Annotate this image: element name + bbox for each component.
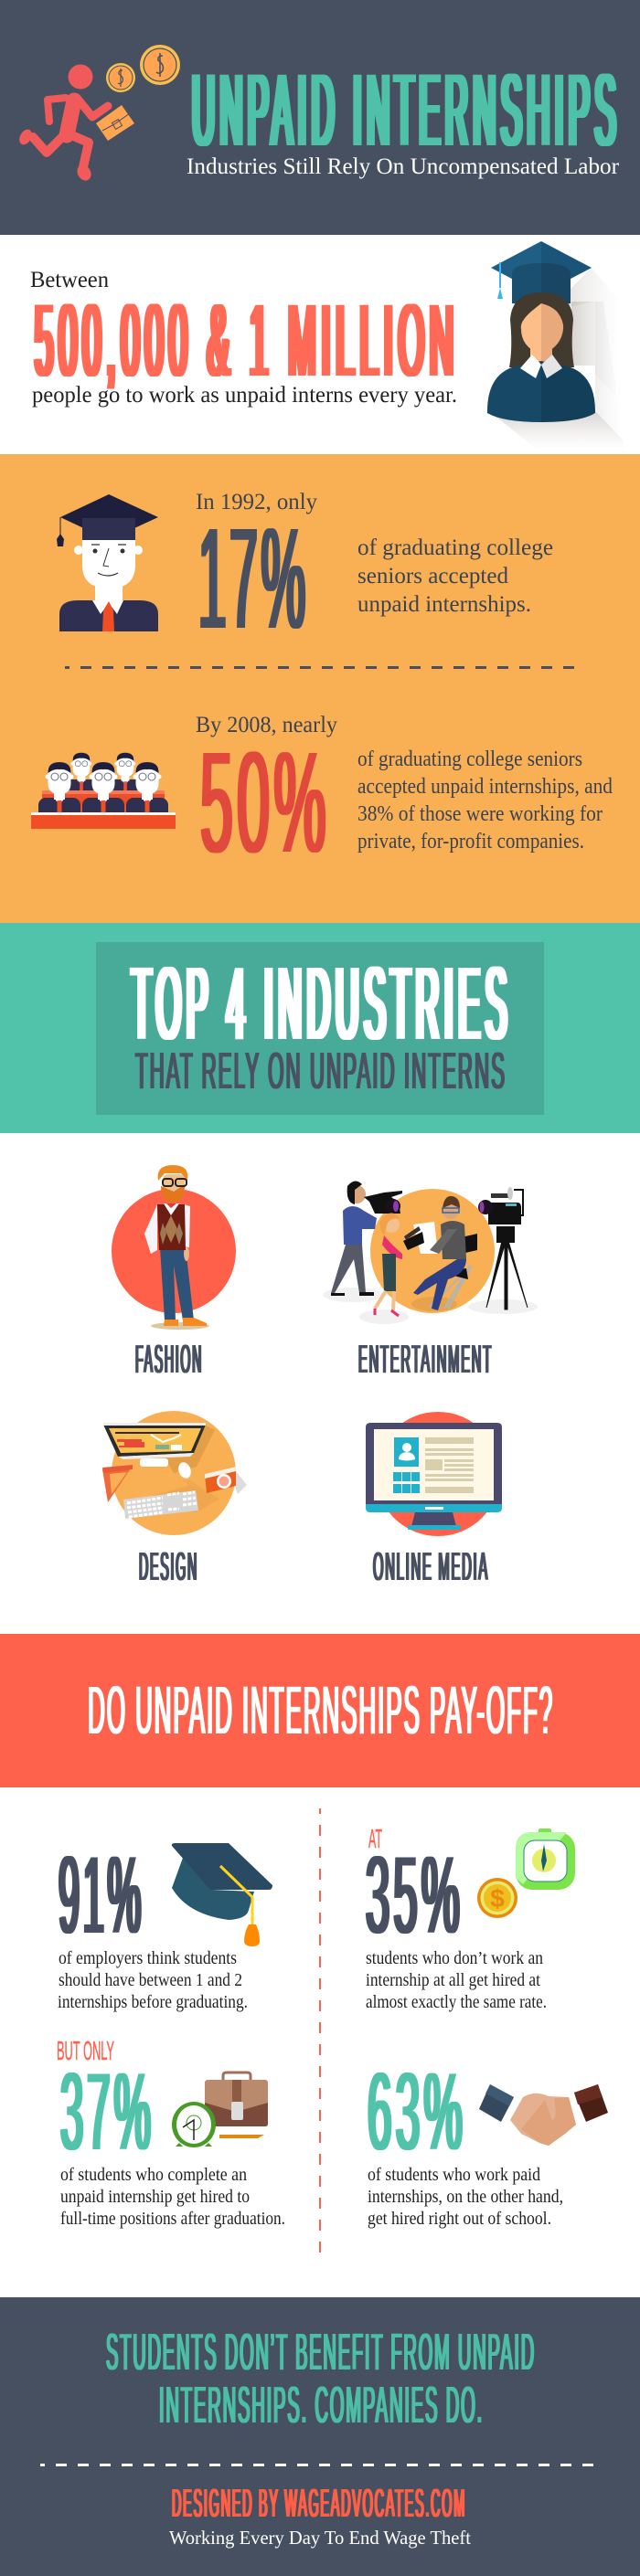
- text: 37 percent description: unpaid internship get hired to: [60, 2187, 250, 2207]
- icon: gold coin: [477, 1878, 517, 1918]
- text: in 1992: In 1992, only: [196, 490, 317, 514]
- panel: industries: DESIGN: [139, 1544, 198, 1589]
- icon: running man with briefcase: [16, 64, 134, 183]
- panel: industries: [102, 1165, 538, 1589]
- panel: top 4 industries heading: [0, 923, 640, 1133]
- text: 63 percent description: get hired right out of school.: [368, 2209, 551, 2229]
- text: 37 percent description: full-time positions after graduation.: [60, 2209, 285, 2229]
- icon: briefcase and alarm clock: [172, 2072, 268, 2147]
- text: 50 percent description: of graduating college seniors: [357, 747, 582, 771]
- text: 37 percent description: of students who complete an: [60, 2165, 247, 2185]
- icon: fashion hipster: [112, 1165, 236, 1330]
- panel: pay-off statistics: AT: [368, 1825, 382, 1854]
- subtitle: Industries Still Rely On Uncompensated Labor: [187, 154, 620, 179]
- text: 35 percent description: internship at all get hired at: [366, 1970, 540, 1990]
- text: 91 percent description: of employers think students: [59, 1948, 237, 1968]
- panel: orange statistics: [0, 454, 640, 923]
- tagline: Working Every Day To End Wage Theft: [169, 2527, 471, 2549]
- icon: male graduate: [57, 494, 158, 631]
- icon: stopwatch: [516, 1829, 575, 1890]
- panel: pay-off statistics: BUT ONLY: [57, 2037, 114, 2066]
- text: 50 percent description: [357, 747, 613, 853]
- icon: design desk: [102, 1411, 247, 1535]
- panel: pay-off statistics: 37%: [60, 2051, 155, 2173]
- panel: orange statistics: 50%: [200, 723, 330, 883]
- icon: small coin: [106, 63, 135, 92]
- icon: handshake: [479, 2084, 608, 2146]
- panel: pay-off statistics: 91%: [59, 1834, 144, 1956]
- text: 17 percent description: of graduating college: [357, 535, 553, 560]
- conclusion heading: [106, 2323, 536, 2434]
- text: 63 percent description: of students who work paid: [368, 2165, 540, 2185]
- text: 37 percent description: [60, 2165, 285, 2229]
- panel: intern count: [0, 235, 640, 454]
- icon: group of students: [31, 753, 176, 829]
- text: 91 percent description: internships before graduating.: [58, 1992, 248, 2012]
- icon: mortarboard: [172, 1843, 272, 1946]
- panel: footer: [0, 2297, 640, 2576]
- panel: header: [0, 0, 640, 235]
- icon: online media monitor: [366, 1412, 502, 1536]
- text: people go to work: people go to work as unpaid interns every year.: [32, 383, 457, 408]
- text: 63 percent description: internships, on the other hand,: [368, 2187, 563, 2207]
- text: by 2008: By 2008, nearly: [196, 713, 337, 737]
- panel: pay-off statistics: 63%: [368, 2051, 466, 2173]
- text: 50 percent description: accepted unpaid internships, and: [357, 775, 613, 799]
- text: between: Between: [30, 268, 109, 292]
- text: 35 percent description: [366, 1948, 547, 2012]
- panel: pay-off statistics: [57, 1808, 608, 2260]
- text: 35 percent description: students who don’t work an: [366, 1948, 543, 1968]
- panel: pay-off heading: [0, 1634, 640, 1787]
- text: 17 percent description: seniors accepted: [357, 564, 508, 588]
- text: 50 percent description: private, for-profit companies.: [357, 830, 584, 853]
- panel: pay-off statistics: 35%: [366, 1834, 464, 1956]
- panel: orange statistics: 17%: [198, 499, 309, 659]
- text: 17 percent description: [357, 535, 553, 617]
- icon: gold coin: $: [490, 1884, 505, 1913]
- text: 17 percent description: unpaid internships.: [357, 592, 531, 617]
- icon: female graduate: [487, 241, 624, 451]
- text: 50 percent description: 38% of those were working for: [357, 802, 603, 826]
- panel: industries: FASHION: [135, 1337, 203, 1382]
- icon: film crew: [323, 1181, 538, 1324]
- text: 35 percent description: almost exactly the same rate.: [366, 1992, 547, 2012]
- text: 91 percent description: should have between 1 and 2: [59, 1970, 242, 1990]
- text: 91 percent description: [58, 1948, 248, 2012]
- icon: large coin: [140, 45, 180, 85]
- text: 63 percent description: [368, 2165, 563, 2229]
